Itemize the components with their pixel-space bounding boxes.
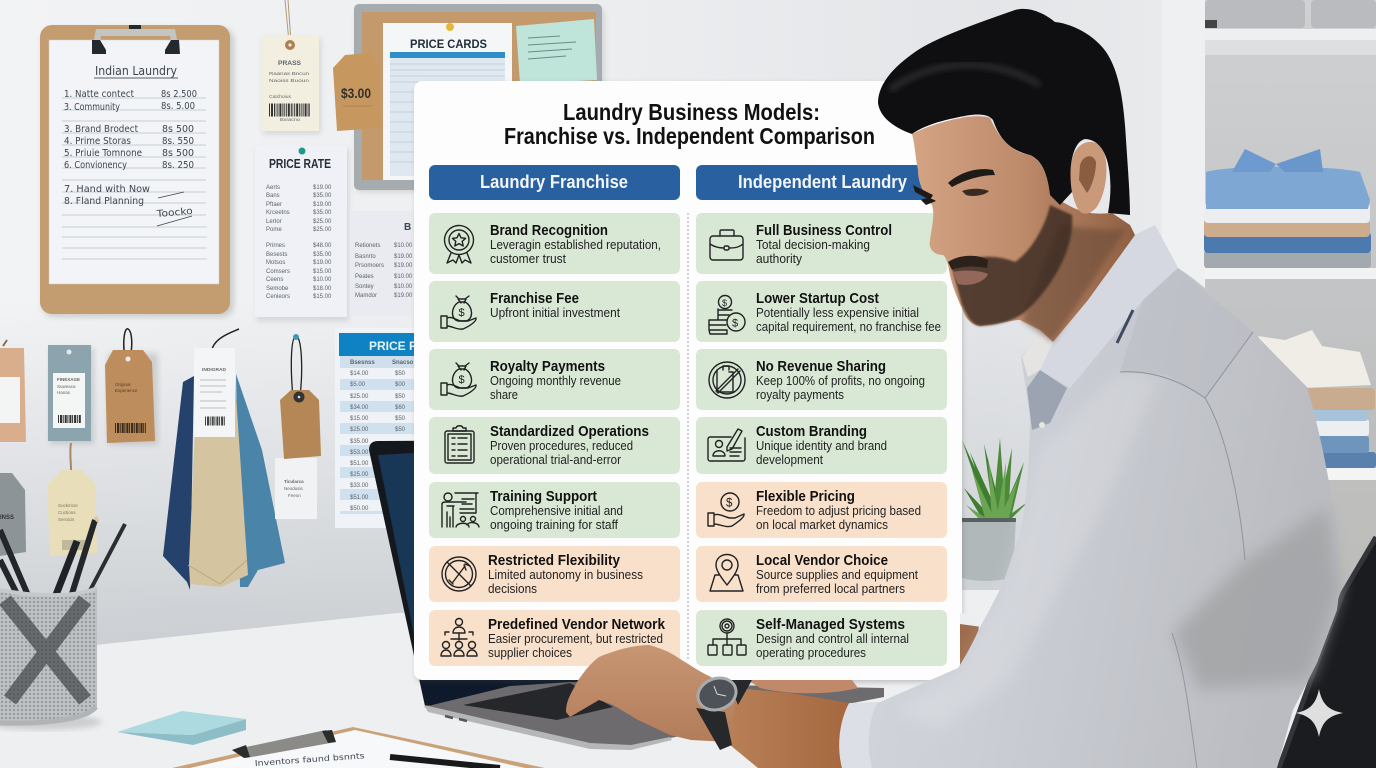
paper: price rate: $10.00 [313, 277, 332, 283]
card: Predefined Vendor Network [429, 610, 680, 666]
kraft tag: $3.00: $3.00 [341, 86, 371, 101]
paper: price rate: PRICE RATE [269, 157, 331, 171]
text: Source supplies and equipment [756, 567, 918, 582]
text: Easier procurement, but restricted [488, 631, 663, 646]
paper: second rate sheet: Sontey [355, 284, 374, 290]
hang tag: PRASS: Raanas Bncun [269, 71, 310, 76]
blue price table: $50 [395, 427, 406, 433]
blue price table: $14.00 [350, 371, 369, 377]
text: authority [756, 251, 802, 266]
laptop [369, 440, 884, 750]
ear [1070, 142, 1107, 214]
inner placket [1027, 370, 1067, 430]
eyebrows [948, 169, 995, 187]
hanging tags row [0, 329, 321, 590]
title: Laundry Business Models: [563, 99, 820, 125]
icon: hand with money bag [441, 363, 476, 396]
blue price table: $33.00 [350, 483, 369, 489]
text [488, 616, 666, 660]
blue price table: PRICE RA [369, 339, 427, 353]
folded shirt stack: blue, white, tan [1204, 149, 1371, 268]
text [756, 222, 892, 266]
card: Royalty Payments [429, 349, 680, 410]
column header: Independent Laundry: Independent Laundry [738, 171, 908, 192]
column header: Laundry Franchise: Laundry Franchise [480, 171, 628, 192]
icon: coin stacks: $ [732, 318, 738, 330]
paper: price rate: $48.00 [313, 243, 332, 249]
icon: rosette [444, 226, 474, 263]
text [756, 423, 887, 467]
icon: hand holding money bag [441, 296, 476, 329]
icon: ID card and pen [708, 429, 745, 461]
text: Freedom to adjust pricing based [756, 503, 921, 518]
blue price table: $50 [395, 416, 406, 422]
paper: price rate: $35.00 [313, 193, 332, 199]
blue price table [335, 328, 427, 528]
text: development [756, 452, 823, 467]
text: Proven procedures, reduced [490, 438, 633, 453]
blue price table: Bsesnss [350, 360, 375, 366]
card: Brand Recognition [429, 213, 680, 274]
man at laptop [566, 9, 1340, 768]
paper: price rate: Pome [266, 227, 282, 233]
paper: price rate: Besests [266, 252, 287, 258]
blue price table: $34.00 [350, 405, 369, 411]
clipboard with Indian Laundry list: 8s. 550 [162, 136, 194, 147]
text: Comprehensive initial and [490, 503, 623, 518]
clipboard with Indian Laundry list: 8s 500 [162, 148, 194, 159]
paper: second rate sheet: Retionets [355, 243, 380, 249]
paper: second rate sheet: $10.00 [394, 284, 413, 290]
icon: gear and process tree [708, 619, 746, 655]
desk clipboard with notes [172, 727, 545, 768]
text: Franchise Fee [490, 290, 579, 307]
hang tag: PRASS: Naoiss Buoun [269, 78, 310, 83]
card: Training Support [429, 482, 680, 538]
title [504, 99, 875, 149]
near forearm [724, 688, 849, 768]
paper: price rate: $19.00 [313, 185, 332, 191]
paper: second rate sheet: $19.00 [394, 254, 413, 260]
text: Predefined Vendor Network [488, 616, 666, 633]
column header: Laundry Franchise [429, 165, 680, 200]
text: Unique identity and brand [756, 438, 887, 453]
text: from preferred local partners [756, 581, 905, 596]
card: Franchise Fee [429, 281, 680, 342]
icon: coin stacks [709, 296, 745, 334]
clipboard with Indian Laundry list: 6. Convionency [64, 160, 127, 171]
icon: prohibited receipt [709, 362, 745, 398]
paper: second rate sheet: $10.00 [394, 274, 413, 280]
desk clipboard with notes: Inventors faund bsnnts [255, 751, 365, 768]
tag: grey blue: FINEXAGE [57, 377, 80, 382]
text: Lower Startup Cost [756, 290, 879, 307]
title: Franchise vs. Independent Comparison [504, 123, 875, 149]
text [490, 488, 623, 532]
tag: kraft with barcode: Original [115, 382, 131, 387]
hang tag: PRASS: Bxracno [280, 117, 301, 122]
text: supplier choices [488, 645, 572, 660]
text: Training Support [490, 488, 597, 505]
card: Full Business Control [696, 213, 947, 274]
text: Restricted Flexibility [488, 552, 621, 569]
sleeve lit area [895, 372, 1160, 730]
card: Flexible Pricing [696, 482, 947, 538]
card: Self-Managed Systems [696, 610, 947, 666]
card: No Revenue Sharing [696, 349, 947, 410]
blue price table: $35.00 [350, 439, 369, 445]
blue price table: Snacso [392, 360, 414, 366]
hang tag: PRASS [261, 0, 321, 134]
clipboard with Indian Laundry list: 7. Hand with Now [64, 184, 150, 195]
icon: map pin [710, 554, 743, 591]
paper: second rate sheet: B [404, 222, 411, 233]
tag: kraft with barcode: Experience [115, 388, 138, 393]
kraft tag with white card [275, 334, 321, 519]
text [490, 423, 649, 467]
text [490, 222, 661, 266]
text [756, 290, 941, 334]
cork board with price cards: PRICE CARDS [410, 37, 487, 51]
main comparison panel [414, 81, 962, 682]
paper: price rate: $19.00 [313, 260, 332, 266]
text: No Revenue Sharing [756, 358, 886, 375]
icon: hand holding money bag: $ [458, 307, 465, 319]
clipboard with Indian Laundry list: 4. Prime Storas [64, 136, 131, 147]
cuff [836, 702, 878, 768]
tag: grey blue: Hanas [57, 390, 71, 395]
paper: price rate: Bans [266, 193, 280, 199]
yoke [1120, 268, 1253, 398]
clipboard with Indian Laundry list: 3. Community [64, 102, 120, 113]
tag: kraft with barcode [105, 329, 158, 445]
white tag on tie: INDIGRAD [202, 367, 227, 372]
clipboard with Indian Laundry list: 1. Natte contect [64, 89, 134, 100]
card: Local Vendor Choice [696, 546, 947, 602]
clipboard with Indian Laundry list: 8s 500 [162, 124, 194, 135]
paper: price rate: $35.00 [313, 210, 332, 216]
paper: second rate sheet: $10.00 [394, 243, 413, 249]
card: Standardized Operations [429, 417, 680, 474]
collar [1040, 225, 1178, 388]
paper: price rate: Prirnes [266, 243, 285, 249]
blue price table: $15.00 [350, 416, 369, 422]
sticky note pad [117, 711, 246, 745]
text [488, 552, 643, 596]
text: operating procedures [756, 645, 866, 660]
text: Design and control all internal [756, 631, 909, 646]
text: Royalty Payments [490, 358, 605, 375]
blue price table: $25.00 [350, 427, 369, 433]
tag: grey blue: Suweaca [57, 384, 76, 389]
clipboard with Indian Laundry list [40, 25, 234, 317]
text: Keep 100% of profits, no ongoing [756, 373, 925, 388]
paper: price rate: Pftaer [266, 202, 282, 208]
text: Limited autonomy in business [488, 567, 643, 582]
clipboard with Indian Laundry list: Toocko [155, 206, 193, 220]
card: Lower Startup Cost [696, 281, 947, 342]
paper: second rate sheet: $19.00 [394, 293, 413, 299]
paper: price rate: Aerts [266, 185, 280, 191]
shirt body [836, 225, 1340, 768]
text [756, 616, 909, 660]
blue price table: $51.00 [350, 461, 369, 467]
kraft tag with white card: Neodusis [284, 486, 304, 491]
tag: tan [0, 340, 26, 442]
blue price table: $25.00 [350, 472, 369, 478]
text [756, 488, 921, 532]
icon: coin stacks: $ [722, 298, 727, 308]
text: decisions [488, 581, 537, 596]
desk [0, 590, 1376, 768]
paper: second rate sheet: Prsomoers [355, 263, 384, 269]
blue price table: $50 [395, 371, 406, 377]
icon: briefcase [710, 230, 743, 260]
paper: second rate sheet: Peates [355, 274, 374, 280]
clipboard with Indian Laundry list: 8s. 250 [162, 160, 194, 171]
neck and face [912, 116, 1135, 342]
far arm and hand [748, 613, 984, 693]
kraft tag with white card: Feeon [288, 493, 301, 498]
text [756, 552, 918, 596]
text: ongoing training for staff [490, 517, 618, 532]
text: Total decision-making [756, 237, 870, 252]
tag: grey: INSS [0, 515, 14, 521]
text: Self-Managed Systems [756, 616, 905, 633]
beard [952, 205, 1072, 326]
paper: second rate sheet: $19.00 [394, 263, 413, 269]
text: Potentially less expensive initial [756, 305, 919, 320]
icon: hand with dollar coin [708, 493, 744, 527]
sparkle watermark [1296, 689, 1343, 737]
hang tag: PRASS: Catchoius [269, 94, 292, 99]
card: Restricted Flexibility [429, 546, 680, 602]
card: Custom Branding [696, 417, 947, 474]
paper: second rate sheet: Mamdor [355, 293, 377, 299]
clipboard with Indian Laundry list: Indian Laundry [95, 64, 177, 78]
lips [953, 271, 988, 285]
hang tag: PRASS: PRASS [278, 61, 301, 67]
kraft tag: $3.00 [333, 53, 381, 131]
paper: price rate: Comsers [266, 269, 290, 275]
torso shadow [1173, 507, 1340, 690]
blue price table: $53.00 [350, 450, 369, 456]
tag: cream: Serotcis [58, 517, 75, 522]
text [756, 358, 925, 402]
blue price table: $50.00 [350, 506, 369, 512]
near hand on keyboard [566, 645, 735, 742]
text: Standardized Operations [490, 423, 649, 440]
column header: Independent Laundry [696, 165, 947, 200]
tag: cream: Sockmcer [58, 503, 79, 508]
mustache [948, 256, 988, 270]
paper: price rate: $25.00 [313, 219, 332, 225]
text: customer trust [490, 251, 566, 266]
text: share [490, 387, 518, 402]
neckties swatch [163, 374, 285, 590]
icon: hand with dollar coin: $ [726, 498, 733, 510]
paper: price rate: Motsos [266, 260, 285, 266]
text: operational trial-and-error [490, 452, 622, 467]
text [490, 358, 621, 402]
paper: price rate: Semobe [266, 286, 289, 292]
paper: price rate: $15.00 [313, 269, 332, 275]
paper: price rate: $15.00 [313, 294, 332, 300]
cork board with price cards [354, 4, 604, 192]
text: Brand Recognition [490, 222, 608, 239]
paper: price rate: Krceetns [266, 210, 290, 216]
icon: hand with money bag: $ [458, 374, 465, 386]
potted plant [962, 438, 1030, 581]
tag: grey blue [48, 345, 94, 444]
paper: price rate [255, 146, 349, 321]
text [490, 290, 620, 320]
blue price table: $50 [395, 394, 406, 400]
icon: prohibited tools [442, 557, 476, 591]
text: Flexible Pricing [756, 488, 855, 505]
paper: price rate: $25.00 [313, 227, 332, 233]
paper: price rate: Ceens [266, 277, 283, 283]
text: Custom Branding [756, 423, 867, 440]
hair [878, 9, 1130, 215]
blue price table: $51.00 [350, 495, 369, 501]
text: Leveragin established reputation, [490, 237, 661, 252]
tag: cream [47, 443, 97, 556]
text: Ongoing monthly revenue [490, 373, 621, 388]
paper: price rate: Lertor [266, 219, 282, 225]
pencil cup [0, 518, 125, 730]
text: Local Vendor Choice [756, 552, 888, 569]
tag: cream: Cuctions [58, 510, 76, 515]
folded towels top shelf [1205, 0, 1376, 28]
paper: price rate: $18.00 [313, 286, 332, 292]
clipboard with Indian Laundry list: 8s. 5.00 [161, 101, 195, 112]
text: royalty payments [756, 387, 844, 402]
text: on local market dynamics [756, 517, 888, 532]
wristwatch [691, 671, 752, 750]
paper: price rate: Cenieors [266, 294, 290, 300]
text: capital requirement, no franchise fee [756, 319, 941, 334]
blue price table: $5.00 [350, 382, 366, 388]
kraft tag with white card: Ticularca [284, 479, 304, 484]
text: Upfront initial investment [490, 305, 620, 320]
paper: price rate: $35.00 [313, 252, 332, 258]
paper: second rate sheet [350, 211, 416, 316]
shelf unit with folded clothes [1162, 0, 1376, 600]
clipboard with Indian Laundry list: 8. Fland Planning [64, 196, 144, 207]
eyes [962, 189, 989, 196]
office chair [1277, 537, 1376, 768]
tag: grey [0, 473, 26, 556]
paper: second rate sheet: Basnrto [355, 254, 376, 260]
blue price table: $60 [395, 405, 406, 411]
clipboard with Indian Laundry list: 8s 2.500 [161, 89, 197, 100]
paper: price rate: $19.00 [313, 202, 332, 208]
folded shirt stack: white, blue [1258, 330, 1376, 468]
blue price table: $00 [395, 382, 406, 388]
icon: trainer and audience [442, 493, 479, 527]
icon: org network [441, 618, 477, 656]
white tag on tie [194, 329, 239, 437]
icon: clipboard checklist [445, 426, 474, 463]
blue price table: $25.00 [350, 394, 369, 400]
text: Full Business Control [756, 222, 892, 239]
clipboard with Indian Laundry list: 5. Priuie Tomnone [64, 148, 142, 159]
clipboard with Indian Laundry list: 3. Brand Brodect [64, 124, 138, 135]
